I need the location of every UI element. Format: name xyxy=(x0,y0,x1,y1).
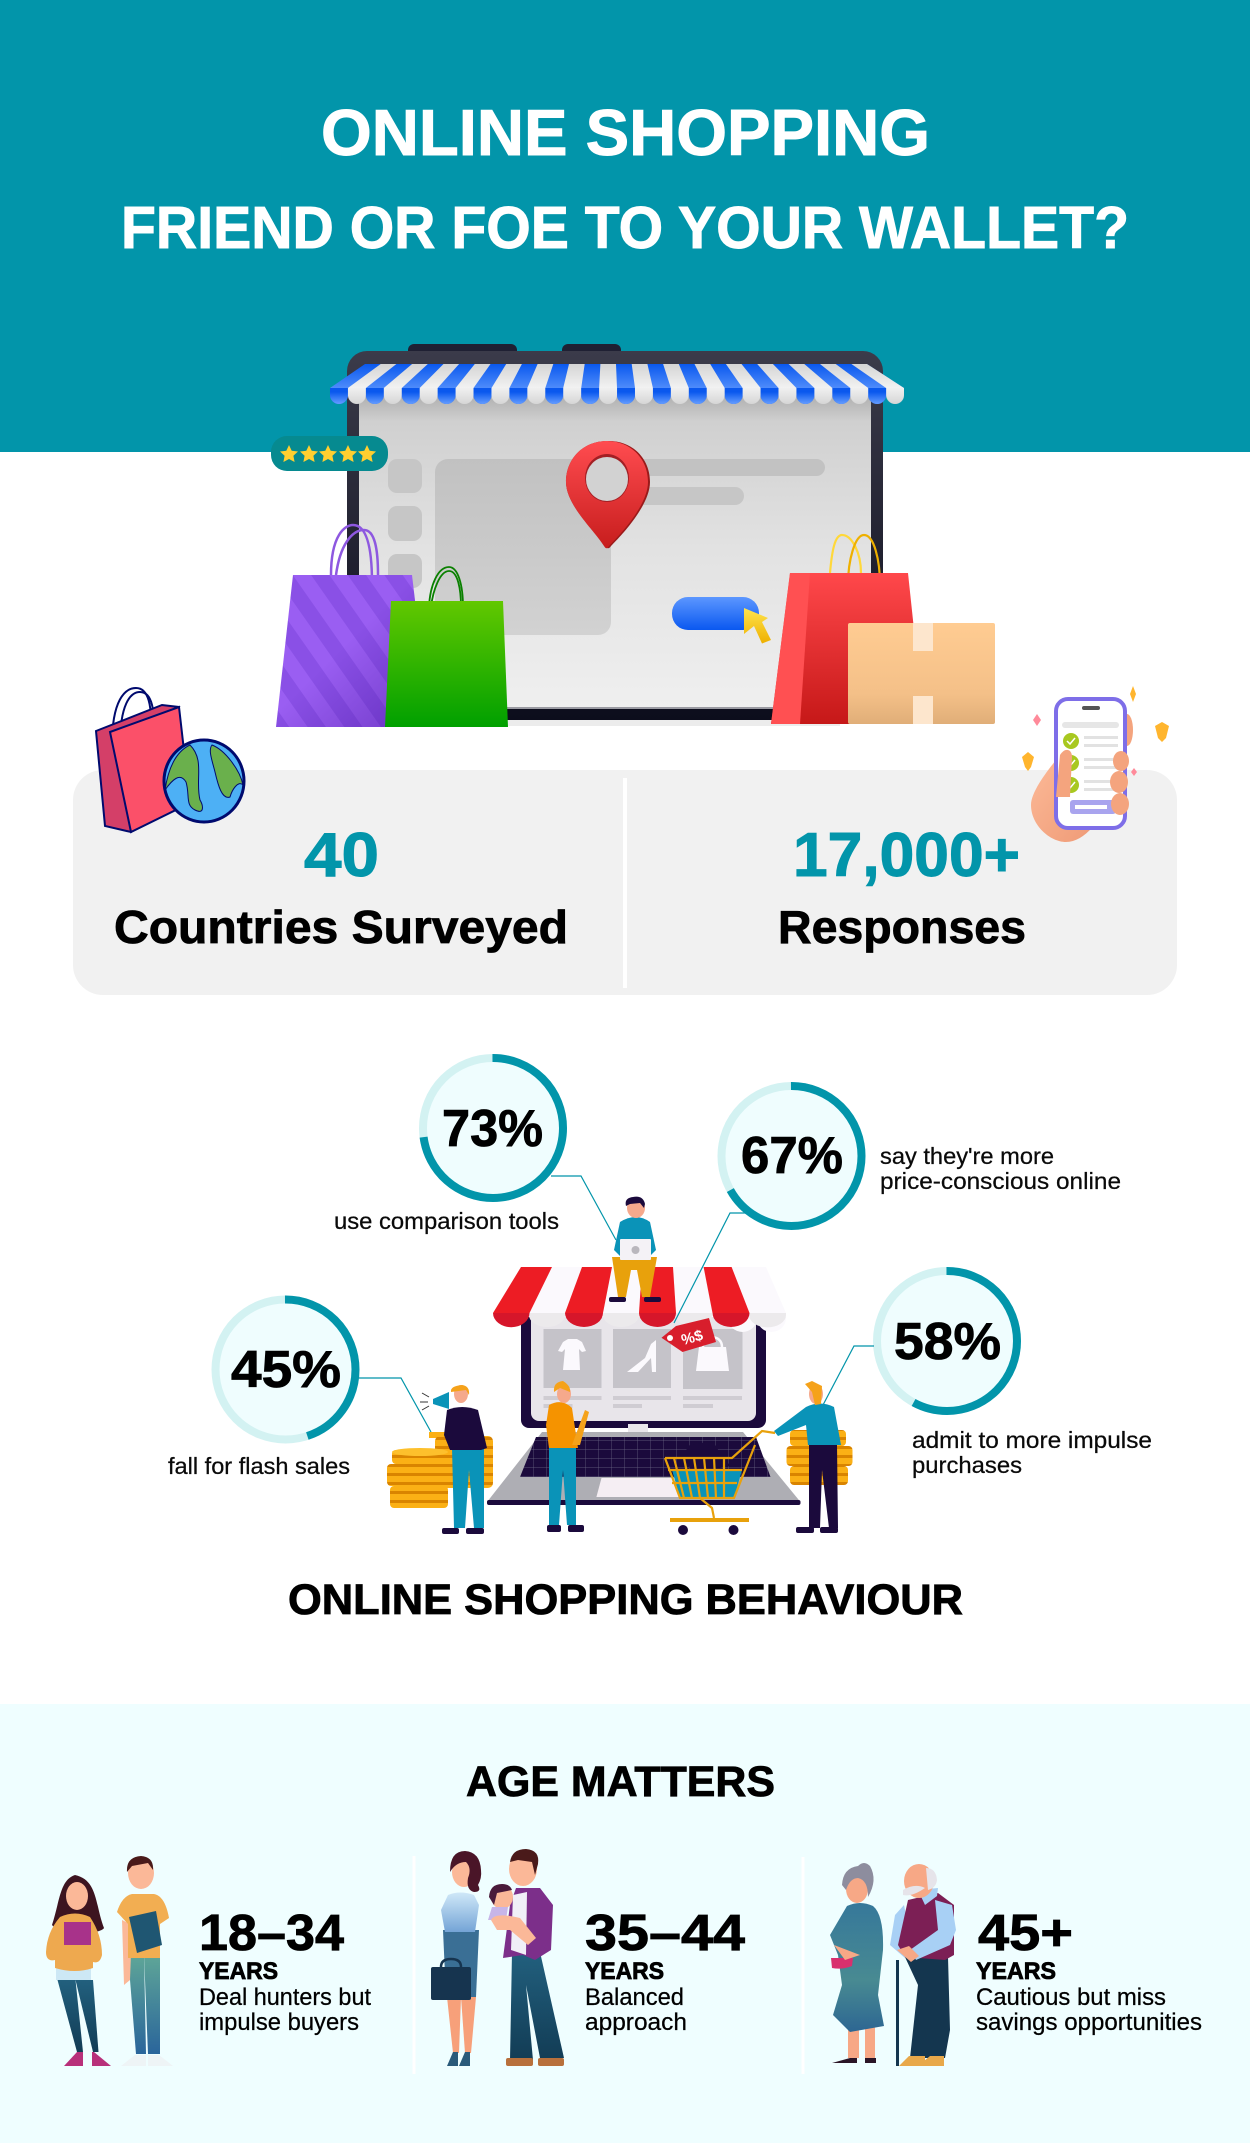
illustration: father with baby xyxy=(488,1849,564,2066)
heading: online shopping behaviour: ONLINE SHOPPING BEHAVIOUR xyxy=(288,1576,963,1624)
coins xyxy=(387,1430,852,1508)
price tag xyxy=(662,1318,716,1352)
chart: 58% impulse: 58% xyxy=(894,1313,1001,1371)
group: 45+ years: Cautious but miss xyxy=(976,1984,1166,2011)
group: 18-34 years: Deal hunters but xyxy=(199,1984,371,2011)
group: 35-44 years: YEARS xyxy=(585,1958,664,1985)
stat: responses: 17,000+ xyxy=(793,821,1020,890)
shopping cart xyxy=(665,1431,775,1535)
map pin xyxy=(566,441,650,548)
illustration: young man xyxy=(117,1856,173,2066)
group: 45+ years: YEARS xyxy=(976,1958,1056,1985)
chart: 45% flash sales: fall for flash sales xyxy=(168,1453,350,1479)
screen placeholders xyxy=(388,459,825,635)
chart: 67% price-conscious: price-conscious online xyxy=(880,1168,1121,1194)
chart: 73% comparison tools xyxy=(334,1058,616,1240)
illustration: laptop store with shoppers xyxy=(387,1197,852,1535)
illustration: elderly woman xyxy=(830,1863,884,2063)
person: with phone xyxy=(546,1381,589,1532)
group: 35-44 years: 35–44 xyxy=(585,1904,746,1961)
heading: age matters: AGE MATTERS xyxy=(466,1758,775,1806)
price tag: %$ xyxy=(679,1327,705,1349)
group: 45+ years: 45+ xyxy=(978,1904,1073,1961)
group: 45+ years: savings opportunities xyxy=(976,2009,1202,2036)
awning xyxy=(330,364,904,405)
chart: 58% impulse xyxy=(823,1271,1152,1478)
icon: hand holding phone xyxy=(1022,686,1169,842)
person: sitting on roof with laptop xyxy=(609,1197,661,1302)
chart: 67% price-conscious: 67% xyxy=(741,1127,843,1185)
group: 18-34 years: YEARS xyxy=(199,1958,278,1985)
stat: countries: Countries Surveyed xyxy=(114,901,568,953)
monitor frame xyxy=(347,351,883,720)
chart: 58% impulse: admit to more impulse xyxy=(912,1427,1152,1453)
person: pushing cart xyxy=(774,1381,841,1533)
chart: 67% price-conscious xyxy=(722,1086,1121,1226)
group: 45+ years xyxy=(830,1863,1202,2066)
chart: 58% impulse: purchases xyxy=(912,1452,1022,1478)
panel: survey stats xyxy=(73,770,1177,995)
monitor screen xyxy=(359,390,871,707)
red shopping bag xyxy=(771,535,924,724)
stat: countries xyxy=(114,821,568,953)
chart: 45% flash sales: 45% xyxy=(231,1341,341,1399)
group: 35-44 years: Balanced xyxy=(585,1984,684,2011)
panel: age matters xyxy=(0,1704,1250,2143)
header band xyxy=(0,0,1250,452)
chart: 73% comparison tools: 73% xyxy=(442,1100,543,1158)
illustration: elderly man with cane xyxy=(890,1864,956,2066)
title xyxy=(121,96,1129,261)
stat: responses: Responses xyxy=(778,901,1026,953)
green shopping bag xyxy=(385,567,508,727)
button and cursor xyxy=(672,597,771,644)
rating pill xyxy=(271,436,388,471)
group: 35-44 years xyxy=(431,1849,746,2066)
illustration: online storefront xyxy=(271,344,995,727)
laptop base xyxy=(487,1424,800,1505)
group: 35-44 years: approach xyxy=(585,2009,687,2036)
illustration: young woman xyxy=(46,1875,111,2066)
chart: 45% flash sales xyxy=(168,1300,431,1479)
group: 18-34 years: impulse buyers xyxy=(199,2009,359,2036)
stat: countries: 40 xyxy=(304,821,379,890)
icon: bag and globe xyxy=(96,688,244,832)
group: 18-34 years: 18–34 xyxy=(199,1904,345,1961)
title: ONLINE SHOPPING xyxy=(321,96,930,169)
chart: 67% price-conscious: say they're more xyxy=(880,1143,1054,1169)
browser tabs xyxy=(408,344,621,352)
store awning xyxy=(493,1267,786,1332)
person: with megaphone xyxy=(420,1385,487,1534)
purple shopping bag xyxy=(276,525,430,727)
store screen xyxy=(521,1317,766,1428)
chart: 73% comparison tools: use comparison tools xyxy=(334,1208,559,1234)
arrow: leader line from 67% to price tag xyxy=(674,1213,746,1323)
illustration: mother xyxy=(431,1851,481,2066)
cardboard box xyxy=(848,623,995,724)
stat: responses xyxy=(778,821,1026,953)
title: FRIEND OR FOE TO YOUR WALLET? xyxy=(121,195,1129,261)
group: 18-34 years xyxy=(46,1856,371,2066)
